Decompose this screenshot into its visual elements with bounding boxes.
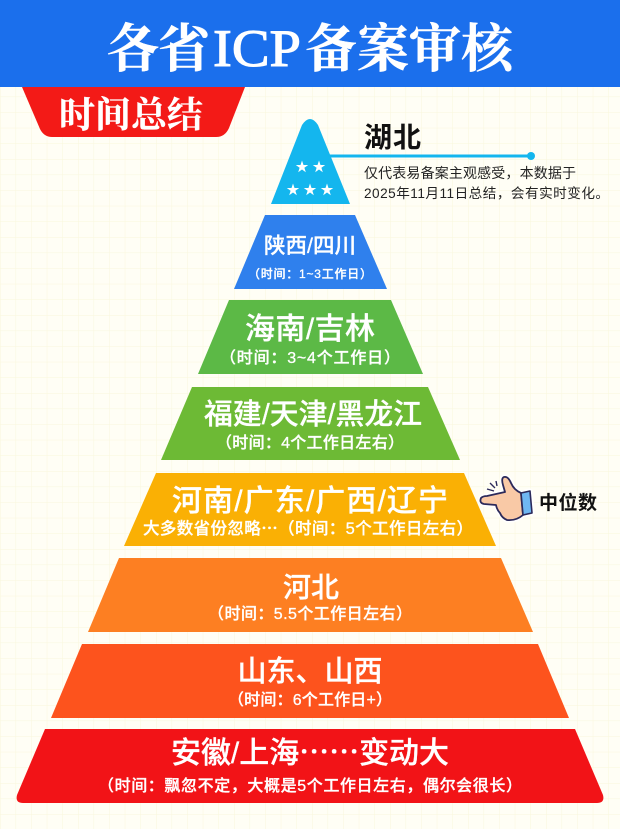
tier 3: 海南/吉林 — [198, 300, 423, 374]
icon: stars — [287, 160, 333, 195]
header banner — [0, 0, 620, 87]
tier 4: 福建/天津/黑龙江: 福建/天津/黑龙江 — [204, 399, 422, 431]
tier 8: 安徽/上海……变动大: 安徽/上海……变动大 — [171, 728, 449, 772]
tier 2: 陕西/四川 — [234, 215, 387, 289]
tier 7: 山东、山西: 山东、山西 — [238, 655, 382, 688]
tier 8: 安徽/上海……变动大 — [17, 728, 603, 803]
tier 3: 海南/吉林: （时间：3~4个工作日） — [220, 349, 400, 367]
title — [107, 20, 517, 79]
callout: 湖北 note: 仅代表易备案主观感受，本数据于 — [364, 165, 576, 181]
tier 6: 河北: （时间：5.5个工作日左右） — [208, 605, 412, 623]
tier 2: 陕西/四川: （时间：1~3工作日） — [248, 267, 372, 281]
icon: pointing hand — [480, 477, 532, 520]
title: 各省 — [107, 21, 212, 79]
label: 中位数: 中位数 — [539, 491, 597, 514]
title: ICP — [213, 20, 301, 78]
tier 8: 安徽/上海……变动大: （时间：飘忽不定，大概是5个工作日左右，偶尔会很长） — [98, 776, 522, 795]
callout: 湖北 note: 湖北 — [364, 122, 421, 153]
tier 7: 山东、山西: （时间：6个工作日+） — [228, 691, 392, 709]
tier 5: 河南/广东/广西/辽宁: 河南/广东/广西/辽宁 — [172, 485, 448, 518]
callout: 湖北 note: 2025年11月11日总结，会有实时变化。 — [364, 186, 609, 201]
section tab: 时间总结: 时间总结 — [59, 95, 203, 135]
tier 4: 福建/天津/黑龙江: （时间：4个工作日左右） — [216, 434, 404, 452]
tier 5: 河南/广东/广西/辽宁 — [124, 473, 496, 546]
tier 1: 湖北 — [271, 119, 350, 204]
section tab: 时间总结 — [22, 87, 245, 137]
tier 6: 河北 — [88, 558, 533, 632]
title: 备案审核 — [305, 21, 517, 79]
tier 4: 福建/天津/黑龙江 — [161, 387, 460, 460]
tier 6: 河北: 河北 — [283, 572, 339, 603]
tier 2: 陕西/四川: 陕西/四川 — [264, 234, 356, 258]
tier 5: 河南/广东/广西/辽宁: 大多数省份忽略…（时间：5个工作日左右） — [143, 515, 473, 539]
tier 7: 山东、山西 — [51, 644, 569, 718]
tier 3: 海南/吉林: 海南/吉林 — [245, 313, 375, 346]
callout: 湖北 note — [329, 122, 609, 201]
